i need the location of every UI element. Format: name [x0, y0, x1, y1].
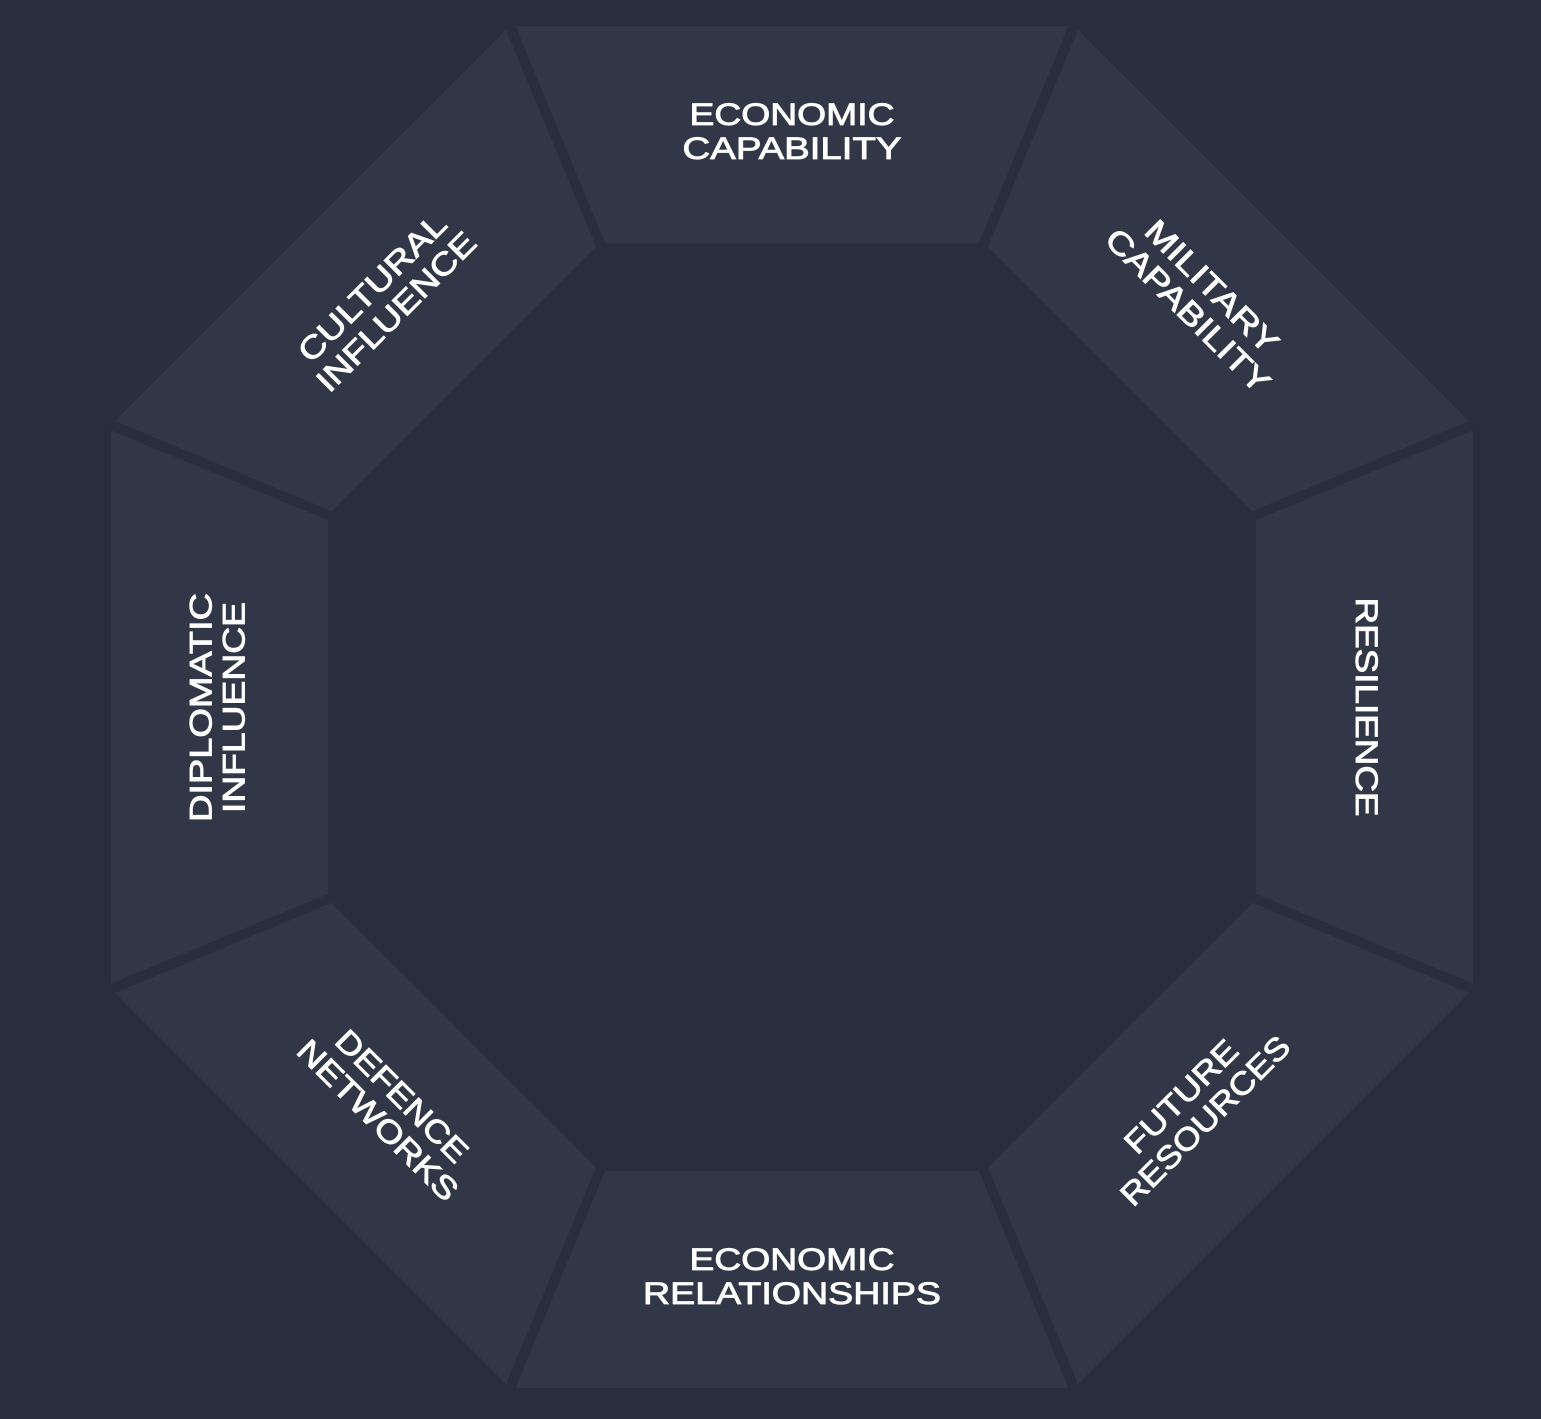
label: cultural influence: INFLUENCE	[309, 224, 483, 399]
panel: diplomatic influence	[111, 430, 328, 984]
label: future resources	[1089, 1004, 1297, 1213]
label: economic relationships: RELATIONSHIPS	[643, 1275, 941, 1311]
label: military capability: CAPABILITY	[1098, 221, 1278, 400]
label: defence networks	[290, 1008, 490, 1208]
panel: military capability	[925, 30, 1469, 574]
label: future resources: RESOURCES	[1113, 1028, 1297, 1213]
label: defence networks: DEFENCE	[328, 1022, 476, 1170]
label: diplomatic influence: INFLUENCE	[216, 602, 252, 813]
label: defence networks: NETWORKS	[290, 1032, 466, 1208]
label: cultural influence	[285, 200, 483, 399]
panel: resilience	[1256, 430, 1473, 984]
label: economic capability: ECONOMIC	[690, 96, 894, 132]
label: military capability: MILITARY	[1138, 212, 1286, 361]
panel: defence networks	[115, 840, 659, 1384]
label: diplomatic influence	[182, 593, 252, 822]
label: diplomatic influence: DIPLOMATIC	[182, 593, 218, 822]
label: economic relationships: ECONOMIC	[690, 1241, 894, 1277]
label: economic capability	[682, 96, 902, 166]
label: economic capability: CAPABILITY	[682, 130, 902, 166]
panel: economic relationships	[516, 1171, 1068, 1388]
label: cultural influence: CULTURAL	[290, 206, 454, 369]
panel: economic capability	[516, 26, 1068, 243]
label: economic relationships	[643, 1241, 941, 1311]
label: resilience: RESILIENCE	[1349, 598, 1385, 816]
panel: future resources	[925, 840, 1469, 1384]
label: future resources: FUTURE	[1117, 1032, 1245, 1161]
label: military capability	[1098, 197, 1302, 400]
panel: cultural influence	[115, 30, 659, 574]
